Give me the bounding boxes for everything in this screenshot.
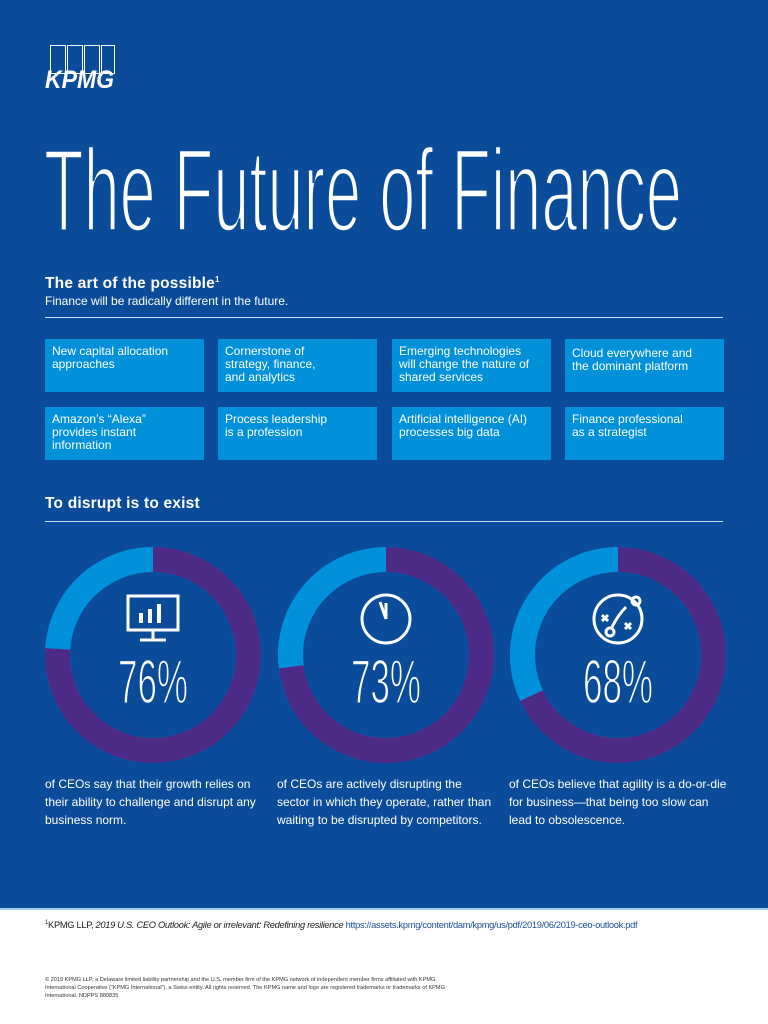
panel: possibilities grid <box>45 339 724 460</box>
donut 1 <box>58 560 248 750</box>
donut 1: 76% <box>118 648 188 717</box>
box 2: Cornerstone of strategy, finance, and analytics <box>225 344 316 384</box>
heading: to disrupt: To disrupt is to exist <box>45 495 200 512</box>
box 1: New capital allocation approaches <box>52 344 168 371</box>
box 1 <box>45 339 204 392</box>
box 3: Emerging technologies will change the nature of shared services <box>399 344 529 384</box>
box 5 <box>45 407 204 460</box>
donut 2: 73% <box>351 648 421 717</box>
box 6: Process leadership is a profession <box>225 412 327 439</box>
box 8: Finance professional as a strategist <box>572 412 683 439</box>
caption 2: of CEOs are actively disrupting the sector in which they operate, rather than waiting to be disrupted by competitors. <box>277 777 491 827</box>
box 7 <box>392 407 551 460</box>
box 6 <box>218 407 377 460</box>
box 7: Artificial intelligence (AI) processes big data <box>399 412 527 439</box>
copyright: © 2019 KPMG LLP, a Delaware limited liability partnership and the U.S. member firm of the KPMG network of independent member firms affiliated with KPMG International Cooperative (“KPMG International”), a Swiss entity. All rights reserved. The KPMG name and logo are registered trademarks or trademarks of KPMG International. NDPPS 880835 <box>45 977 445 999</box>
box 3 <box>392 339 551 392</box>
heading: art of the possible: The art of the possible1 <box>45 275 220 292</box>
donut 3 <box>522 560 714 750</box>
caption 1: of CEOs say that their growth relies on their ability to challenge and disrupt any business norm. <box>45 777 256 827</box>
icon: clock <box>362 595 410 643</box>
subtitle: Finance will be radically different in the future. <box>45 294 288 308</box>
box 4: Cloud everywhere and the dominant platform <box>572 346 692 373</box>
donut 2 <box>290 560 482 750</box>
box 5: Amazon’s “Alexa” provides instant information <box>52 412 146 452</box>
box 4 <box>565 339 724 392</box>
donut charts <box>45 547 726 763</box>
icon: monitor chart <box>128 596 178 640</box>
box 2 <box>218 339 377 392</box>
logo: KPMG <box>45 45 115 89</box>
footnote: 1KPMG LLP, 2019 U.S. CEO Outlook: Agile or irrelevant: Redefining resilience https://assets.kpmg/content/dam/kpmg/us/pdf/2019/06/2019-ceo-outlook.pdf <box>45 920 637 930</box>
icon: strategy <box>594 595 642 643</box>
box 8 <box>565 407 724 460</box>
caption 3: of CEOs believe that agility is a do-or-die for business—that being too slow can lead to obsolescence. <box>509 777 726 827</box>
donut 3: 68% <box>583 648 653 717</box>
